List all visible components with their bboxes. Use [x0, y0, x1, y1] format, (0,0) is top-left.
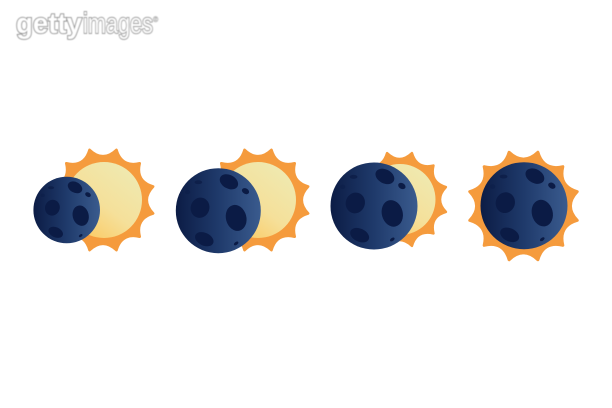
watermark: gettyimages logo	[16, 8, 159, 40]
sun 2	[208, 150, 308, 250]
watermark: gettyimages logo: ®	[153, 16, 159, 24]
watermark: gettyimages logo: images	[83, 8, 153, 40]
sun 4	[470, 152, 577, 260]
sun 3	[353, 153, 446, 246]
moon 1	[33, 177, 100, 243]
moon 4	[480, 162, 568, 249]
sun 1	[53, 150, 153, 250]
watermark: gettyimages logo: getty	[16, 8, 82, 40]
moon 2	[176, 168, 261, 253]
eclipse phase 3	[330, 153, 446, 250]
eclipse phase 1	[33, 150, 153, 250]
eclipse phase 2	[176, 150, 308, 253]
eclipse phase 4: total	[470, 152, 577, 260]
moon 3	[330, 162, 418, 250]
